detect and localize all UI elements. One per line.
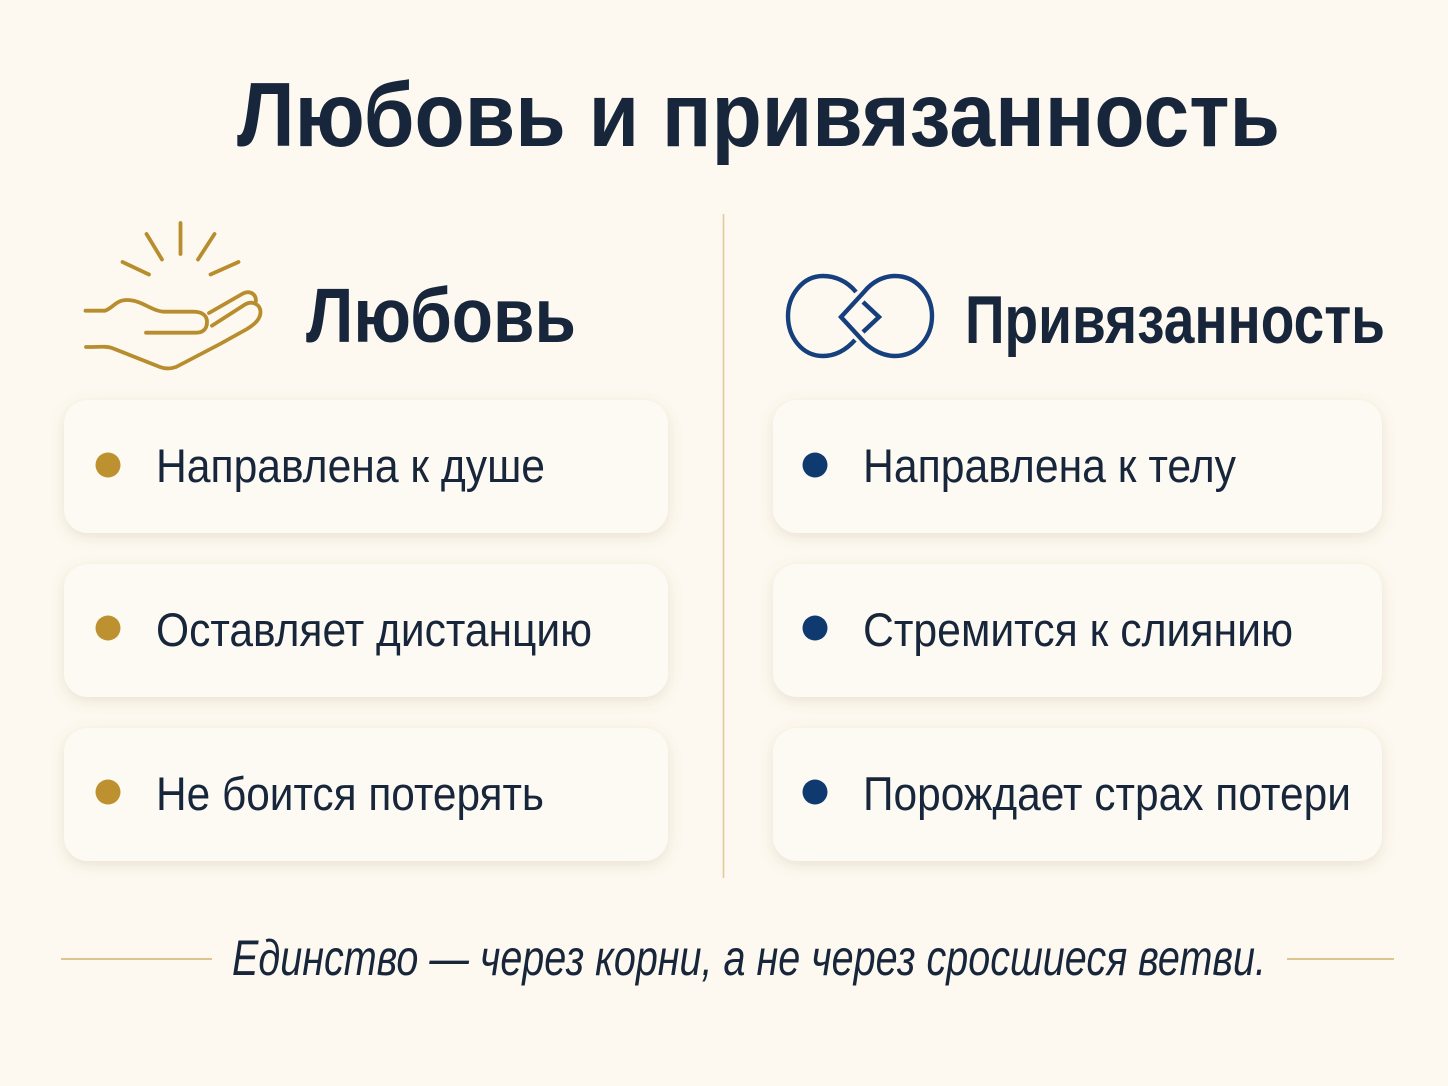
panel: love (64, 223, 668, 861)
heading: love: Любовь (306, 273, 576, 359)
icon: interlocked infinity (788, 276, 932, 356)
icon: open hand with rays (86, 223, 260, 368)
title: Любовь и привязанность (237, 65, 1280, 166)
card: love item 1: Направлена к душе (156, 439, 545, 492)
card: love item 1 (64, 400, 668, 533)
card: love item 2: Оставляет дистанцию (156, 603, 592, 656)
card: love item 3 (64, 728, 668, 861)
card: attachment item 2: Стремится к слиянию (863, 603, 1293, 656)
card: attachment item 2 (773, 564, 1382, 697)
card: love item 2 (64, 564, 668, 697)
card: attachment item 1: Направлена к телу (863, 439, 1236, 492)
card: attachment item 3 (773, 728, 1382, 861)
panel: attachment (773, 276, 1385, 861)
card: attachment item 1 (773, 400, 1382, 533)
card: love item 3: Не боится потерять (156, 767, 544, 820)
card: attachment item 3: Порождает страх потери (863, 767, 1351, 820)
